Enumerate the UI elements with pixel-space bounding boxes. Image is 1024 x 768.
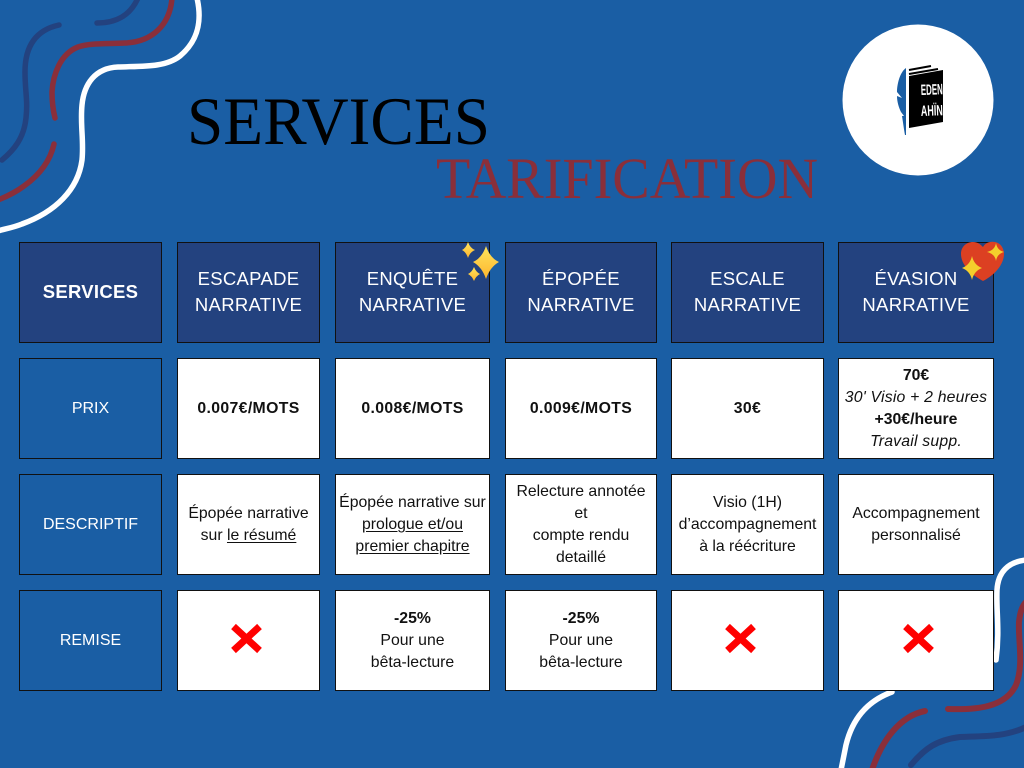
discount: enquête: bêta-lecture xyxy=(371,654,454,671)
logo: Eden Ahïn book and quill: AHÏN xyxy=(921,102,943,120)
discount: enquête: Pour une xyxy=(380,632,445,649)
header: escapade narrative: NARRATIVE xyxy=(195,294,302,315)
description: évasion: Accompagnement xyxy=(852,505,980,522)
header: escale narrative xyxy=(671,242,824,343)
header: évasion narrative: NARRATIVE xyxy=(862,294,970,315)
discount: épopée: Pour une xyxy=(549,632,613,649)
description: épopée: detaillé xyxy=(556,549,606,566)
discount: escale, none xyxy=(671,590,824,691)
price: évasion xyxy=(838,358,994,459)
header: évasion narrative xyxy=(838,242,994,343)
header row xyxy=(19,242,994,343)
discount: épopée: -25% xyxy=(563,610,599,627)
description: épopée: compte rendu xyxy=(533,527,629,544)
price: évasion: 70€ xyxy=(903,367,929,384)
discount: épopée: bêta-lecture xyxy=(539,654,623,671)
description: épopée xyxy=(505,474,657,575)
header: enquête narrative: NARRATIVE xyxy=(359,294,466,315)
price: épopée xyxy=(505,358,657,459)
icon: sparkles xyxy=(462,242,499,281)
price: évasion: Travail supp. xyxy=(870,433,962,450)
description: enquête: premier chapitre xyxy=(355,538,470,555)
price: escapade xyxy=(177,358,320,459)
description: enquête xyxy=(335,474,490,575)
header: évasion narrative: ÉVASION xyxy=(874,268,957,289)
title xyxy=(187,83,818,211)
description: escale: d’accompagnement xyxy=(679,516,816,533)
header: escapade narrative: ESCAPADE xyxy=(198,268,299,289)
icon: sparkling heart xyxy=(961,242,1004,281)
logo: Eden Ahïn book and quill xyxy=(842,24,994,176)
description: épopée: et xyxy=(574,505,588,522)
header: épopée narrative xyxy=(505,242,657,343)
label: descriptif: DESCRIPTIF xyxy=(43,516,138,532)
price row xyxy=(19,358,994,459)
price: évasion: 30' Visio + 2 heures xyxy=(845,389,987,406)
description: escale: à la réécriture xyxy=(699,538,796,555)
description: escapade xyxy=(177,474,320,575)
label: remise: REMISE xyxy=(60,632,121,648)
price: escapade: 0.007€/MOTS xyxy=(197,400,300,417)
header: escapade narrative xyxy=(177,242,320,343)
description: épopée: Relecture annotée xyxy=(516,483,646,500)
price: enquête: 0.008€/MOTS xyxy=(361,400,464,417)
discount row xyxy=(19,590,994,691)
label: prix: PRIX xyxy=(72,400,109,416)
description: enquête: prologue et/ou xyxy=(362,516,463,533)
price: escale xyxy=(671,358,824,459)
title: SERVICES xyxy=(187,83,490,159)
label: descriptif xyxy=(19,474,162,575)
header: enquête narrative: ENQUÊTE xyxy=(367,268,458,289)
description: évasion: personnalisé xyxy=(871,527,961,544)
description: escale: Visio (1H) xyxy=(713,494,782,511)
header: services xyxy=(19,242,162,343)
header: enquête narrative xyxy=(335,242,490,343)
discount: épopée xyxy=(505,590,657,691)
description row xyxy=(19,474,994,575)
description: escale xyxy=(671,474,824,575)
discount: évasion, none xyxy=(838,590,994,691)
discount: escapade, none xyxy=(177,590,320,691)
description: escapade: sur le résumé xyxy=(201,527,296,544)
header: escale narrative: NARRATIVE xyxy=(694,294,801,315)
price: enquête xyxy=(335,358,490,459)
price: escale: 30€ xyxy=(734,400,761,417)
title: TARIFICATION xyxy=(436,146,818,211)
logo: Eden Ahïn book and quill: EDEN xyxy=(921,81,943,99)
header: services: SERVICES xyxy=(43,281,138,302)
discount: enquête xyxy=(335,590,490,691)
discount: enquête: -25% xyxy=(394,610,431,627)
price: évasion: +30€/heure xyxy=(874,411,957,428)
label: remise xyxy=(19,590,162,691)
label: prix xyxy=(19,358,162,459)
header: épopée narrative: ÉPOPÉE xyxy=(542,268,620,289)
header: épopée narrative: NARRATIVE xyxy=(527,294,635,315)
description: enquête: Épopée narrative sur xyxy=(339,494,486,511)
header: escale narrative: ESCALE xyxy=(710,268,785,289)
description: évasion xyxy=(838,474,994,575)
price: épopée: 0.009€/MOTS xyxy=(530,400,632,417)
description: escapade: Épopée narrative xyxy=(188,505,309,522)
